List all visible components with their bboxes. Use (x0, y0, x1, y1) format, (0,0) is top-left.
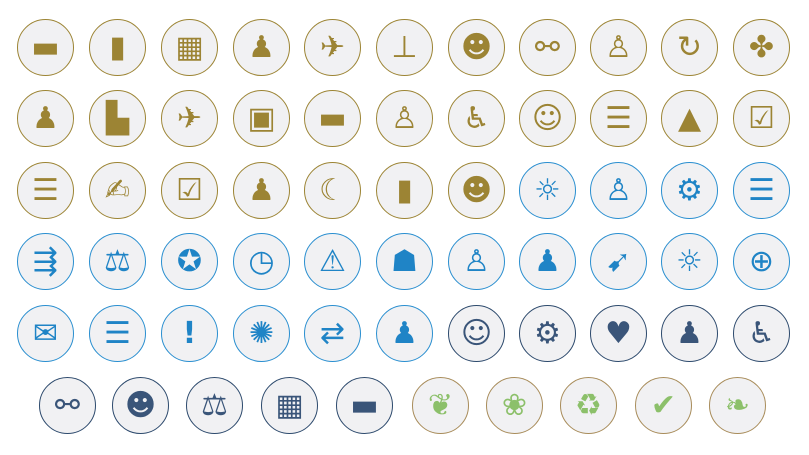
row 1 gold icons (17, 19, 790, 76)
row 5 blue and navy icons: ✺ (249, 316, 274, 350)
row 4 blue icons: ⊕ (749, 244, 774, 278)
row 2 gold icons: ♟ (32, 100, 59, 136)
row 4 blue icons: ⇶ (33, 244, 58, 278)
row 2 gold icons: ▬ (318, 100, 347, 136)
row 3 gold and blue icons: ♙ (605, 172, 632, 208)
row 5 blue and navy icons: ⚙ (534, 316, 561, 350)
row 2 gold icons (17, 90, 790, 147)
row 1 gold icons: ▬ (31, 30, 60, 64)
row 1 gold icons: ✤ (749, 30, 774, 64)
row 1 gold icons: ⊥ (391, 30, 418, 64)
row 5 blue and navy icons (17, 305, 790, 362)
row 3 gold and blue icons: ☾ (319, 172, 346, 208)
row 2 gold icons: ☑ (748, 100, 775, 136)
row 2 gold icons: ♙ (391, 100, 418, 136)
row 3 gold and blue icons: ✍ (105, 172, 130, 208)
row 3 gold and blue icons (17, 162, 790, 219)
row 1 gold icons: ↻ (677, 30, 702, 64)
row 5 blue and navy icons: ✉ (33, 316, 58, 350)
row 6 navy and green icons: ⚯ (55, 388, 80, 422)
row 2 gold icons: ▲ (678, 100, 701, 136)
row 2 gold icons: ☺ (532, 100, 563, 136)
row 5 blue and navy icons: ♟ (391, 316, 418, 350)
row 3 gold and blue icons: ⚙ (676, 172, 703, 208)
row 4 blue icons: ✪ (177, 244, 202, 278)
row 2 gold icons: ♿ (463, 100, 490, 136)
row 4 blue icons: ◷ (248, 244, 275, 278)
row 4 blue icons: ♙ (463, 244, 490, 278)
row 2 gold icons: ▣ (247, 100, 276, 136)
row 6 navy and green icons: ♻ (575, 388, 602, 422)
row 3 gold and blue icons: ☑ (176, 172, 203, 208)
row 6 navy and green icons: ❀ (502, 388, 527, 422)
row 3 gold and blue icons: ☰ (32, 172, 59, 208)
row 4 blue icons (17, 233, 790, 290)
row 4 blue icons: ♟ (534, 244, 561, 278)
row 5 blue and navy icons: ☰ (104, 316, 131, 350)
row 4 blue icons: ☗ (391, 244, 418, 278)
row 3 gold and blue icons: ♟ (248, 172, 275, 208)
row 5 blue and navy icons: ♟ (676, 316, 703, 350)
row 3 gold and blue icons: ☰ (748, 172, 775, 208)
row 5 blue and navy icons: ! (183, 316, 196, 350)
row 1 gold icons: ✈ (320, 30, 345, 64)
row 6 navy and green icons: ☻ (125, 388, 156, 422)
row 2 gold icons: ☰ (605, 100, 632, 136)
row 1 gold icons: ♙ (605, 30, 632, 64)
row 1 gold icons: ♟ (248, 30, 275, 64)
row 5 blue and navy icons: ⇄ (320, 316, 345, 350)
row 1 gold icons: ▮ (109, 30, 126, 64)
row 6 navy and green icons: ⚖ (201, 388, 228, 422)
row 1 gold icons: ▦ (175, 30, 204, 64)
row 6 navy and green icons: ✔ (651, 388, 676, 422)
row 1 gold icons: ⚯ (535, 30, 560, 64)
row 6 navy and green icons (39, 377, 766, 434)
row 3 gold and blue icons: ☼ (534, 172, 561, 208)
row 6 navy and green icons: ❦ (428, 388, 453, 422)
row 3 gold and blue icons: ▮ (396, 172, 413, 208)
row 4 blue icons: ⚠ (319, 244, 346, 278)
row 5 blue and navy icons: ♿ (748, 316, 775, 350)
row 4 blue icons: ➹ (606, 244, 631, 278)
row 5 blue and navy icons: ☺ (461, 316, 492, 350)
row 4 blue icons: ⚖ (104, 244, 131, 278)
row 6 navy and green icons: ▬ (350, 388, 379, 422)
row 6 navy and green icons: ▦ (275, 388, 304, 422)
row 2 gold icons: ✈ (177, 100, 202, 136)
row 4 blue icons: ☼ (676, 244, 703, 278)
row 6 navy and green icons: ❧ (725, 388, 750, 422)
row 5 blue and navy icons: ♥ (605, 316, 632, 350)
row 1 gold icons: ☻ (461, 30, 492, 64)
row 3 gold and blue icons: ☻ (461, 172, 492, 208)
row 2 gold icons: ▙ (106, 100, 129, 136)
